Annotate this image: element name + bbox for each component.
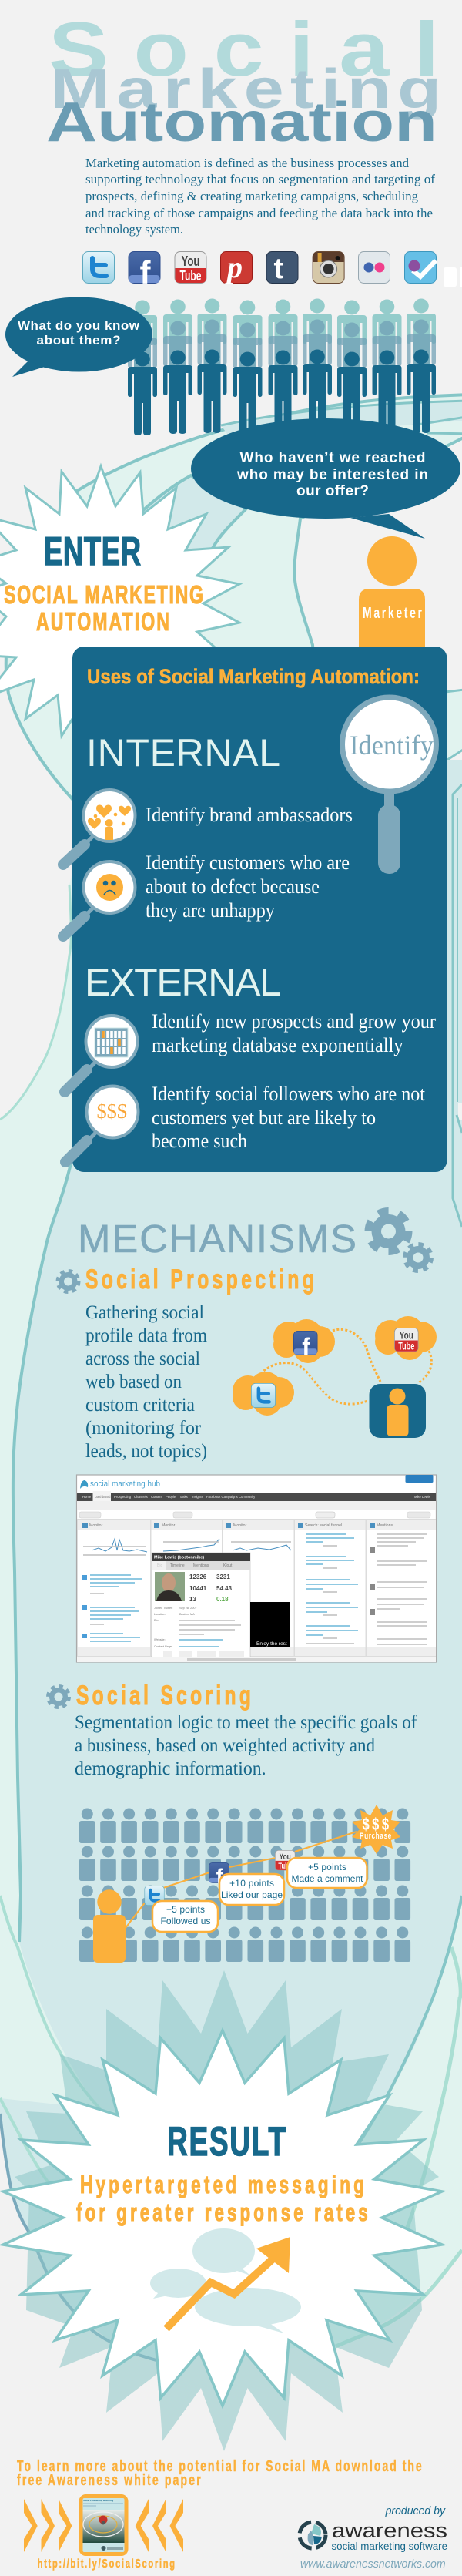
icon: youtube small: Tube [278,1862,292,1871]
screenshot: social marketing hub dashboard: Content [151,1495,163,1499]
user profile modal: 13 [189,1596,196,1603]
text: gathering social profile data: (monitoring for [85,1418,202,1439]
screenshot: social marketing hub dashboard: Mike Lewis [414,1495,430,1499]
cloud: twitter [233,1372,294,1416]
screenshot: social marketing hub dashboard: Insights [192,1495,203,1499]
speech bubble: who haven't we reached: who may be interested in [236,467,428,483]
icon: flickr [359,251,390,284]
starburst: enter social marketing automation: ENTER [44,528,141,574]
result subheading [76,2171,368,2226]
screenshot: social marketing hub dashboard: Dashboard [95,1495,111,1499]
intro paragraph: prospects, defining & creating marketing campaigns, scheduling [85,189,418,203]
call to action text: To learn more about the potential for Social MA download the [17,2457,422,2475]
background swoosh: central pale field [0,689,462,2219]
icon: youtube: You [182,254,200,269]
title: Marketing [50,57,441,120]
call to action text [17,2457,422,2489]
user profile modal: Sep 28, 2007 [179,1607,197,1610]
user profile modal: Klout [223,1563,233,1568]
user profile modal: Boston, MA [179,1613,195,1616]
callout: made a comment: Made a comment [291,1873,363,1884]
icon: tumblr [266,251,298,285]
white paper url: http://bit.ly/SocialScoring [38,2556,175,2570]
arrows pointing to white paper [24,2499,183,2552]
user profile modal: 10441 [189,1585,207,1592]
white paper cover: Social Prospecting & Scoring [83,2499,113,2502]
speech bubble: who haven't we reached [191,418,460,539]
text: identify new prospects [152,1010,436,1056]
scoring crowd grid [79,1808,410,1962]
icon: magnifier with database [65,1016,137,1092]
text: identify customers who are about to defect: about to defect because [146,875,320,898]
heading: external: EXTERNAL [85,961,281,1004]
intro paragraph: Marketing automation is defined as the business processes and [85,156,409,170]
icon: gear social prospecting [59,1271,79,1291]
screenshot: social marketing hub dashboard: Community [239,1495,256,1499]
speech bubble: what do you know [5,297,152,377]
intro paragraph: technology system. [85,222,183,237]
icon: large magnifier identify: Identify [350,730,434,761]
icon: facebook [293,1331,317,1361]
text: identify new prospects: Identify new prospects and grow your [152,1010,436,1033]
screenshot: social marketing hub dashboard: Monitor [233,1523,247,1528]
speech bubble: who haven't we reached: Who haven’t we reached [240,450,425,466]
icon: large magnifier identify [342,697,436,874]
icon: facebook: f [140,254,151,291]
text: identify social followers [152,1083,426,1152]
icon: small gear [405,1245,431,1270]
icon: twitter [251,1383,276,1408]
icon: youtube [394,1328,418,1352]
user profile modal: Location: [154,1613,166,1616]
purchase burst: $$$ [362,1815,389,1835]
speech bubble: who haven't we reached: our offer? [296,483,369,499]
cloud: facebook [273,1319,335,1363]
scoring path lines [126,1832,357,1928]
screenshot: social marketing hub dashboard [77,1475,436,1662]
icon: magnifier with dollars [65,1086,139,1162]
icon: facebook [129,251,160,291]
crowd of figures [128,299,436,435]
title: Social [49,6,439,92]
text: identify customers who are about to defect [146,851,350,922]
background swoosh: lower-left curve [0,2098,200,2360]
text: segmentation logic [75,1712,417,1779]
text: identify brand ambassadors: Identify brand ambassadors [146,804,353,826]
network diagram: clouds to person [233,1316,437,1438]
user profile modal: 0.18 [216,1596,229,1603]
title [46,6,441,153]
icon: youtube: Tube [180,268,202,284]
callout: made a comment: +5 points [308,1862,346,1872]
dashboard logo: social marketing hub [90,1479,160,1489]
screenshot: social marketing hub dashboard: Tasks [179,1495,188,1499]
result subheading: Hypertargeted messaging [80,2171,364,2198]
awareness logo: awareness [332,2519,447,2542]
icon: youtube small [275,1850,295,1871]
marketer figure: Marketer [363,603,422,622]
screenshot: social marketing hub dashboard: People [166,1495,176,1499]
marketer figure [359,536,425,655]
text: gathering social profile data: across the social [85,1348,200,1369]
social icons row [83,250,436,291]
icon: pinterest [220,250,253,284]
speech bubble icons and growth arrow [150,2228,301,2333]
callout: liked our page: +10 points [229,1878,274,1889]
callout: followed us: Followed us [160,1916,211,1926]
text: identify social followers: customers yet but are likely to [152,1107,376,1129]
heading: internal: INTERNAL [86,731,280,774]
heading: social scoring: Social Scoring [76,1681,251,1711]
screenshot: social marketing hub dashboard: Facebook Campaigns [206,1495,238,1499]
user profile modal: Mike Lewis (bostonmike) [154,1555,204,1560]
title: Automation [46,92,437,153]
icon: facebook small: f [216,1865,223,1888]
user profile modal [152,1553,250,1659]
callout: liked our page [219,1874,284,1905]
intro paragraph: supporting technology that focus on segmentation and targeting of [85,172,435,186]
icon: large gear [368,1211,408,1251]
user profile modal: Mentions [193,1563,209,1568]
user profile modal: Bio: [154,1619,159,1622]
icon: youtube: Tube [398,1341,415,1352]
user profile modal: 3231 [216,1573,230,1580]
icon: facebook small [209,1862,229,1888]
website url: www.awarenessnetworks.com [300,2558,446,2571]
white paper cover [79,2494,128,2556]
screenshot: social marketing hub dashboard: Mentions [377,1523,393,1528]
user profile modal: 12326 [189,1573,207,1580]
icon: magnifier with dollars: $$$ [97,1100,127,1123]
text: identify social followers: Identify social followers who are not [152,1083,426,1105]
text: identify new prospects: marketing database exponentially [152,1034,403,1056]
icon: foursquare [405,251,436,284]
user profile modal: 54.43 [216,1585,233,1592]
user profile modal: Contact Page: [154,1645,172,1648]
purchase burst [352,1805,400,1854]
starburst: enter social marketing automation: AUTOMATION [36,608,169,636]
text: segmentation logic: Segmentation logic to meet the specific goals of [75,1712,417,1733]
background swoosh: lower mint field [0,872,462,2350]
heading: mechanisms: MECHANISMS [78,1217,357,1261]
purchase burst: Purchase [360,1832,392,1841]
text: gathering social profile data: web based on [85,1372,182,1392]
screenshot: social marketing hub dashboard: Monitor [162,1523,176,1528]
text: identify social followers: become such [152,1130,247,1152]
user profile modal: Timeline [170,1563,185,1568]
video thumbnail [250,1602,290,1647]
text: identify customers who are about to defect: Identify customers who are [146,851,350,874]
result heading: RESULT [167,2118,286,2165]
user profile modal: Bio [157,1563,162,1568]
icon: youtube small: You [280,1852,291,1862]
text: segmentation logic: demographic information. [75,1758,266,1779]
text: gathering social profile data: Gathering social [85,1302,204,1323]
text: gathering social profile data: custom criteria [85,1395,195,1416]
awareness logo [300,2519,447,2552]
text: identify customers who are about to defect: they are unhappy [146,899,275,922]
icon: youtube [175,251,206,284]
awareness logo: social marketing software [331,2541,447,2552]
user profile modal: Website: [154,1638,166,1641]
starburst: enter social marketing automation: SOCIAL MARKETING [4,581,203,610]
screenshot: social marketing hub dashboard: Search: social funnel [305,1523,342,1528]
speech bubble: what do you know: about them? [37,333,120,348]
cloud: youtube [375,1316,437,1360]
user profile modal: Joined Twitter: [154,1607,172,1610]
screenshot: social marketing hub dashboard: Monitor [89,1523,103,1528]
speech bubble: what do you know: What do you know [18,318,140,333]
screenshot: social marketing hub dashboard: Prospecting [114,1495,132,1499]
video thumbnail: Enjoy the rest [256,1641,287,1647]
callout: followed us: +5 points [166,1904,205,1915]
text: gathering social profile data: profile data from [85,1325,208,1346]
icon: youtube: You [400,1329,413,1341]
starburst: enter social marketing automation [0,466,239,736]
intro paragraph: and tracking of those campaigns and feeding the data back into the [85,206,433,220]
call to action text: free Awareness white paper [17,2470,201,2489]
icon: magnifier with hearts [63,790,136,865]
intro paragraph [85,156,435,237]
callout: followed us [152,1901,218,1932]
icon: instagram [313,251,344,284]
result shadow burst [15,1970,439,2451]
result subheading: for greater response rates [76,2198,368,2226]
background swoosh: upper mint band [6,395,462,799]
text: segmentation logic: a business, based on weighted activity and [75,1735,375,1756]
panel heading: Uses of Social Marketing Automation: [87,665,420,688]
callout: liked our page: Liked our page [221,1889,283,1900]
icon: facebook: f [302,1333,310,1361]
icon: twitter [83,251,114,284]
screenshot: social marketing hub dashboard: Home [82,1495,92,1499]
decorative white tab [444,267,462,287]
icon: pinterest: p [225,250,243,284]
produced by: produced by [385,2504,446,2517]
heading: social prospecting: Social Prospecting [85,1265,314,1295]
text: gathering social profile data: leads, not topics) [85,1441,207,1462]
callout: made a comment [287,1858,367,1888]
text: gathering social profile data [85,1302,208,1462]
result starburst [3,2030,442,2406]
icon: gear social scoring [49,1687,69,1707]
person tile [370,1384,426,1438]
icon: magnifier with sad face [63,861,136,936]
logo mark [300,2522,326,2548]
panel: uses of social marketing automation [63,647,447,1172]
screenshot: social marketing hub dashboard: Channels [134,1495,148,1499]
marketer orange figure [93,1889,126,1963]
icon: tumblr: t [274,253,283,285]
icon: twitter small [145,1886,164,1906]
